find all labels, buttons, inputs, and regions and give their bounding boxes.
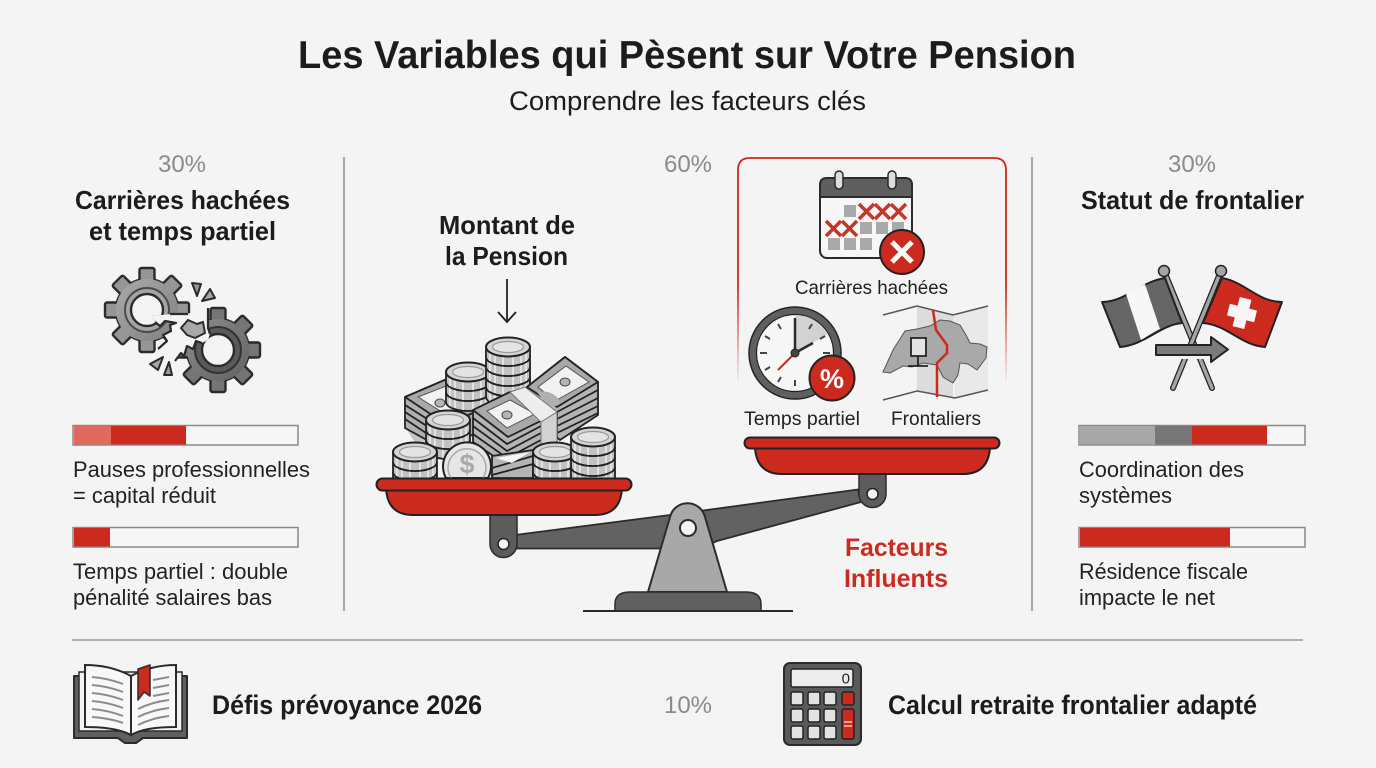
heading: montant de la pension: la Pension bbox=[445, 241, 568, 271]
coin stack 4 bbox=[393, 442, 437, 491]
dollar coin bbox=[443, 442, 491, 479]
percentage 10%: 10% bbox=[664, 692, 712, 719]
right bills bbox=[527, 357, 598, 440]
percentage 60%: 60% bbox=[664, 151, 712, 178]
percentage 30% left: 30% bbox=[158, 151, 206, 178]
icon: clock with percent: % bbox=[820, 364, 844, 394]
balance scale bbox=[376, 338, 1000, 611]
text: coordination des systèmes: Coordination des bbox=[1079, 457, 1244, 482]
text: défis prévoyance 2026: Défis prévoyance 2026 bbox=[212, 690, 482, 720]
icon: calculator bbox=[784, 663, 861, 745]
icon: open book bbox=[74, 665, 187, 743]
center bundle bbox=[473, 387, 557, 464]
arrow: down to money bbox=[498, 279, 516, 322]
coin stack 3 bbox=[426, 410, 470, 459]
fulcrum bbox=[583, 503, 793, 611]
heading: carrières hachées: et temps partiel bbox=[89, 216, 276, 246]
icon: broken gears bbox=[105, 268, 260, 392]
right bracket bbox=[859, 471, 886, 508]
icon: money pile bbox=[393, 338, 615, 491]
label: facteurs influents: Influents bbox=[844, 565, 948, 593]
dollar coin: $ bbox=[459, 449, 475, 479]
text: pauses professionnelles: = capital réduit bbox=[73, 483, 216, 508]
label: carrières hachées: Carrières hachées bbox=[795, 277, 948, 299]
coin stack 1 bbox=[486, 338, 530, 406]
bar: coordination des systèmes bbox=[1079, 426, 1305, 445]
title: Les Variables qui Pèsent sur Votre Pension bbox=[298, 34, 1076, 77]
footer item: calcul retraite bbox=[784, 663, 1257, 745]
left pan bbox=[376, 478, 632, 515]
text: résidence fiscale: Résidence fiscale bbox=[1079, 559, 1248, 584]
label: facteurs influents: Facteurs bbox=[845, 534, 948, 562]
heading: montant de la pension: Montant de bbox=[439, 210, 575, 240]
heading: statut de frontalier: Statut de frontalier bbox=[1081, 185, 1304, 215]
panel: facteurs influents frame bbox=[738, 158, 1006, 385]
heading: carrières hachées: Carrières hachées bbox=[75, 185, 290, 215]
text: temps partiel: pénalité salaires bas bbox=[73, 585, 272, 610]
text: résidence fiscale: impacte le net bbox=[1079, 585, 1215, 610]
left bills bbox=[405, 379, 490, 450]
bar: pauses professionnelles bbox=[73, 426, 298, 445]
label: temps partiel: Temps partiel bbox=[744, 408, 860, 430]
footer item: défis prévoyance bbox=[74, 665, 482, 743]
coin stack 5 bbox=[533, 442, 577, 491]
text: pauses professionnelles: Pauses professionnelles bbox=[73, 457, 310, 482]
coin stack 2 bbox=[446, 362, 490, 411]
icon: calculator: 0 bbox=[842, 670, 850, 688]
lower bills bbox=[492, 450, 533, 478]
text: temps partiel: Temps partiel : double bbox=[73, 559, 288, 584]
left bracket bbox=[490, 512, 517, 558]
coin stack 6 bbox=[571, 428, 615, 486]
subtitle: Comprendre les facteurs clés bbox=[509, 86, 866, 116]
icon: crossed flags and arrow bbox=[1102, 266, 1282, 388]
panel: statut de frontalier bbox=[1079, 151, 1305, 610]
beam bbox=[515, 490, 861, 548]
icon: clock with percent bbox=[749, 307, 854, 400]
text: calcul retraite frontalier adapté: Calcul retraite frontalier adapté bbox=[888, 690, 1257, 720]
panel: carrières hachées bbox=[73, 151, 310, 610]
label: frontaliers: Frontaliers bbox=[891, 408, 981, 430]
text: coordination des systèmes: systèmes bbox=[1079, 483, 1172, 508]
icon: calendar with crossed days bbox=[820, 171, 924, 274]
percentage 30% right: 30% bbox=[1168, 151, 1216, 178]
bar: résidence fiscale bbox=[1079, 528, 1305, 547]
bar: temps partiel bbox=[73, 528, 298, 547]
right pan bbox=[744, 438, 1000, 474]
icon: swiss map with border bbox=[883, 306, 988, 400]
